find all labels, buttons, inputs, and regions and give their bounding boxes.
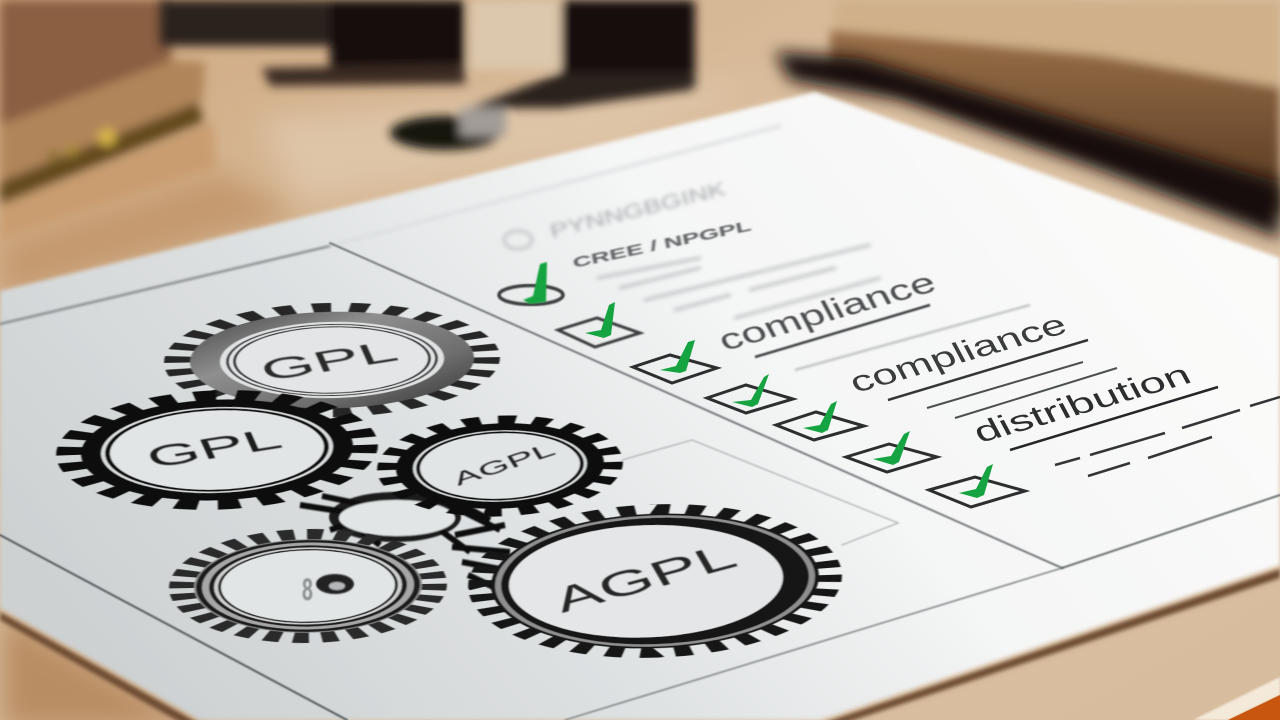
checklist label: distribution xyxy=(968,358,1280,476)
checklist label: compliance, first xyxy=(713,266,1030,370)
book and its shadow, top right xyxy=(775,0,1280,238)
paper shadow xyxy=(0,569,1280,720)
blurred document header: PYNNGBGINK xyxy=(548,177,728,242)
checklist item 2 xyxy=(558,302,640,347)
label: AGPL, small gear: AGPL xyxy=(448,439,559,490)
blurred document sub-heading and text lines: CREE / NPGPL xyxy=(571,216,753,271)
checklist item 4 xyxy=(707,374,793,413)
label: GPL, black gear: GPL xyxy=(141,422,287,475)
emblem inside lower left gear xyxy=(302,571,354,607)
checklist item 3 xyxy=(633,340,717,383)
checklist label: distribution: distribution xyxy=(968,358,1197,449)
blurred dark objects at the back of the desk xyxy=(160,0,695,150)
gear: small black AGPL xyxy=(386,416,614,516)
checklist item 6 xyxy=(846,431,937,472)
small tangled gear behind xyxy=(300,490,510,590)
label: GPL, top gear: GPL xyxy=(255,335,403,388)
checklist label: compliance, first: compliance xyxy=(713,266,942,357)
checklist item 7 xyxy=(929,464,1025,507)
blurred document sub-heading and text lines xyxy=(571,216,880,318)
orange object, bottom right corner xyxy=(1193,677,1280,720)
desk colour variation xyxy=(0,80,760,720)
gear: black GPL xyxy=(68,391,366,509)
wooden box, top left xyxy=(0,0,216,240)
gear: large AGPL xyxy=(481,505,829,657)
gear: top grey GPL xyxy=(179,306,485,414)
checklist item 1 xyxy=(499,262,563,304)
checklist label: compliance, second: compliance xyxy=(844,308,1073,399)
emblem inside lower left gear: 8 xyxy=(302,571,313,607)
checklist label: compliance, second xyxy=(844,308,1117,418)
gear: lower left grey xyxy=(183,533,433,639)
label: AGPL: AGPL xyxy=(545,536,744,620)
blurred document header xyxy=(504,177,728,249)
checklist item 5 xyxy=(776,401,864,440)
